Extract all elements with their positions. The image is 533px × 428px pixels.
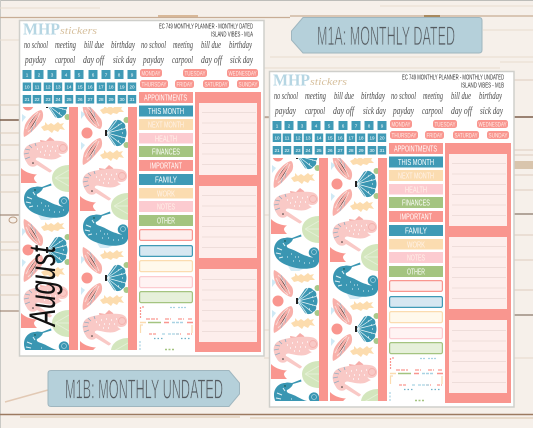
script word stickers xyxy=(274,91,503,117)
outlined box stickers xyxy=(140,230,192,303)
date number squares: 21 xyxy=(24,97,30,102)
date number squares: 25 xyxy=(66,97,72,102)
colored header labels: THIS MONTH xyxy=(148,106,184,116)
script word stickers: carpool xyxy=(55,55,75,66)
date number squares: 5 xyxy=(78,72,81,78)
sticker sheet: monthly dated xyxy=(20,20,264,365)
script word stickers: birthday xyxy=(479,91,502,102)
script word stickers: carpool xyxy=(305,106,325,117)
sheet title: ISLAND VIBES - M1A xyxy=(211,32,253,38)
script word stickers: bill due xyxy=(334,91,354,102)
colored header labels: OTHER xyxy=(407,267,425,277)
date number squares: 7 xyxy=(355,124,358,128)
August script: August xyxy=(22,245,63,327)
script word stickers: sick day xyxy=(230,55,253,66)
script word stickers: day off xyxy=(83,55,105,66)
script word stickers: sick day xyxy=(113,55,136,66)
script word stickers: bill due xyxy=(84,40,104,51)
date number squares: 11 xyxy=(35,84,40,90)
seahorse pattern strip 2 xyxy=(330,158,378,401)
date number squares: 19 xyxy=(369,136,375,140)
seahorse pattern strip 2 xyxy=(80,107,128,350)
script word stickers: no school xyxy=(24,40,48,51)
date number squares: 20 xyxy=(379,136,385,140)
date number squares: 23 xyxy=(295,148,301,153)
sheet title xyxy=(159,24,253,38)
date number squares: 17 xyxy=(98,84,104,90)
colored header labels: THIS MONTH xyxy=(398,157,434,167)
script word stickers: no school xyxy=(141,40,166,51)
seahorse pattern strip 1 xyxy=(21,107,69,350)
sheet title: EC 749 MONTHLY PLANNER - MONTHLY DATED xyxy=(159,24,253,30)
date number squares: 3 xyxy=(301,124,304,128)
logo: stickers xyxy=(60,25,97,37)
date number squares: 13 xyxy=(55,84,61,90)
date number squares: 15 xyxy=(77,84,83,90)
script word stickers: payday xyxy=(142,55,164,66)
date number squares: 29 xyxy=(358,148,364,153)
colored header labels: FAMILY xyxy=(405,226,427,236)
weekday pills: MONDAY xyxy=(392,122,411,128)
date number squares: 22 xyxy=(284,148,290,153)
colored header labels: WORK xyxy=(157,188,175,198)
date number squares: 18 xyxy=(358,136,364,140)
date number squares: 22 xyxy=(34,97,40,102)
weekday pills: FRIDAY xyxy=(426,132,443,140)
sheet title: ISLAND VIBES - M1B xyxy=(461,82,504,90)
date number squares xyxy=(272,121,386,154)
script word stickers: meeting xyxy=(423,91,443,102)
sticker sheet: monthly undated xyxy=(270,70,514,416)
colored header labels: FAMILY xyxy=(155,175,177,185)
date number squares: 8 xyxy=(368,124,371,128)
date number squares: 1 xyxy=(26,72,29,78)
tiny dash and dot stickers xyxy=(390,358,443,401)
colored header labels: IMPORTANT xyxy=(150,161,182,171)
logo: stickers xyxy=(310,76,347,88)
weekday pills: THURSDAY xyxy=(142,82,167,88)
colored header labels: FINANCES xyxy=(152,147,180,157)
date number squares: 29 xyxy=(108,97,114,102)
script word stickers: no school xyxy=(391,91,416,102)
script word stickers: meeting xyxy=(305,91,326,102)
weekday pills: SATURDAY xyxy=(204,82,228,88)
script word stickers: payday xyxy=(24,55,46,66)
sheet paper xyxy=(20,20,264,356)
sheet title xyxy=(402,74,504,90)
outlined box stickers xyxy=(390,281,442,354)
weekday pills: WEDNESDAY xyxy=(228,70,257,78)
date number squares: 10 xyxy=(24,84,30,90)
script word stickers: bill due xyxy=(201,40,221,51)
script word stickers: sick day xyxy=(480,106,503,117)
sheet paper xyxy=(270,72,514,407)
script word stickers: birthday xyxy=(361,91,385,102)
weekday pills: TUESDAY xyxy=(434,122,456,128)
colored header labels: FINANCES xyxy=(402,198,430,208)
script word stickers: birthday xyxy=(111,40,135,51)
date number squares: 31 xyxy=(129,97,135,102)
colored header labels: IMPORTANT xyxy=(400,212,432,222)
colored header labels: WORK xyxy=(407,240,425,250)
salmon strip 1 xyxy=(69,107,78,350)
date number squares: 27 xyxy=(87,97,93,102)
date number squares: 30 xyxy=(369,148,375,153)
date number squares: 16 xyxy=(337,136,343,140)
date number squares: 7 xyxy=(105,72,108,78)
date number squares: 1 xyxy=(276,124,279,128)
date number squares: 26 xyxy=(327,148,333,153)
script word stickers: sick day xyxy=(363,106,386,117)
date number squares: 6 xyxy=(92,72,95,78)
script word stickers: bill due xyxy=(451,91,471,102)
note panel xyxy=(445,143,511,403)
colored header labels: NEXT MONTH xyxy=(398,171,434,181)
script word stickers: payday xyxy=(274,106,296,117)
weekday pills: FRIDAY xyxy=(176,82,193,88)
script word stickers: day off xyxy=(333,106,355,117)
seahorse pattern strip 1 xyxy=(271,158,319,401)
date number squares: 8 xyxy=(118,72,121,78)
weekday pills: THURSDAY xyxy=(392,132,417,140)
weekday pills: SUNDAY xyxy=(488,132,508,140)
colored header labels: HEALTH xyxy=(405,184,427,194)
colored header labels xyxy=(389,143,443,277)
date number squares: 24 xyxy=(305,148,311,153)
script word stickers: carpool xyxy=(172,55,193,66)
date number squares xyxy=(22,70,136,104)
colored header labels: HEALTH xyxy=(155,134,177,144)
date number squares: 30 xyxy=(119,97,125,102)
date number squares: 27 xyxy=(337,148,343,153)
date number squares: 6 xyxy=(342,124,345,128)
date number squares: 26 xyxy=(77,97,83,102)
logo: MHP xyxy=(273,70,310,90)
colored header labels: NOTES xyxy=(407,253,425,263)
tag: M1B monthly undated: M1B: MONTHLY UNDATED xyxy=(65,374,223,404)
script word stickers xyxy=(24,40,253,66)
script word stickers: day off xyxy=(201,55,223,66)
logo xyxy=(273,70,347,90)
script word stickers: no school xyxy=(274,91,298,102)
date number squares: 14 xyxy=(66,84,72,90)
date number squares: 24 xyxy=(55,97,61,102)
date number squares: 16 xyxy=(87,84,93,90)
script word stickers: payday xyxy=(392,106,414,117)
date number squares: 14 xyxy=(316,136,322,140)
weekday pills: SUNDAY xyxy=(238,82,258,88)
weekday pills: TUESDAY xyxy=(184,70,206,78)
date number squares: 10 xyxy=(274,136,280,140)
tag: M1B monthly undated xyxy=(48,370,240,406)
weekday pills: WEDNESDAY xyxy=(478,122,507,128)
date number squares: 19 xyxy=(119,84,125,90)
weekday pills xyxy=(390,120,509,140)
colored header labels: OTHER xyxy=(157,216,175,226)
date number squares: 13 xyxy=(305,136,311,140)
date number squares: 28 xyxy=(98,97,104,102)
tiny dash and dot stickers xyxy=(140,307,193,350)
salmon strip 2 xyxy=(128,107,137,350)
date number squares: 12 xyxy=(45,84,51,90)
weekday pills: MONDAY xyxy=(142,70,161,78)
date number squares: 21 xyxy=(274,148,280,153)
date number squares: 12 xyxy=(295,136,301,140)
logo: MHP xyxy=(23,20,60,38)
salmon strip 1 xyxy=(319,158,328,401)
weekday pills xyxy=(140,69,259,88)
script word stickers: meeting xyxy=(173,40,193,51)
date number squares: 2 xyxy=(288,124,291,128)
tag: M1A monthly dated xyxy=(292,18,482,53)
date number squares: 28 xyxy=(348,148,354,153)
colored header labels: APPOINTMENTS xyxy=(394,144,437,154)
colored header labels: NOTES xyxy=(157,202,175,212)
date number squares: 18 xyxy=(108,84,114,90)
note panel xyxy=(195,92,261,352)
weekday pills: SATURDAY xyxy=(454,132,478,140)
date number squares: 11 xyxy=(285,136,290,140)
date number squares: 15 xyxy=(327,136,333,140)
script word stickers: birthday xyxy=(229,40,252,51)
script word stickers: day off xyxy=(451,106,473,117)
date number squares: 25 xyxy=(316,148,322,153)
date number squares: 4 xyxy=(65,72,68,78)
colored header labels xyxy=(139,92,193,226)
date number squares: 17 xyxy=(348,136,354,140)
script word stickers: meeting xyxy=(55,40,76,51)
salmon strip 2 xyxy=(378,158,387,401)
date number squares: 31 xyxy=(379,148,385,153)
colored header labels: NEXT MONTH xyxy=(148,120,184,130)
script word stickers: carpool xyxy=(422,106,443,117)
date number squares: 23 xyxy=(45,97,51,102)
date number squares: 20 xyxy=(129,84,135,90)
date number squares: 3 xyxy=(51,72,54,78)
colored header labels: APPOINTMENTS xyxy=(144,93,187,103)
date number squares: 5 xyxy=(328,124,331,128)
date number squares: 4 xyxy=(315,124,318,128)
date number squares: 2 xyxy=(38,72,41,78)
date number squares: 9 xyxy=(381,124,384,128)
logo xyxy=(23,20,97,38)
date number squares: 9 xyxy=(131,72,134,78)
